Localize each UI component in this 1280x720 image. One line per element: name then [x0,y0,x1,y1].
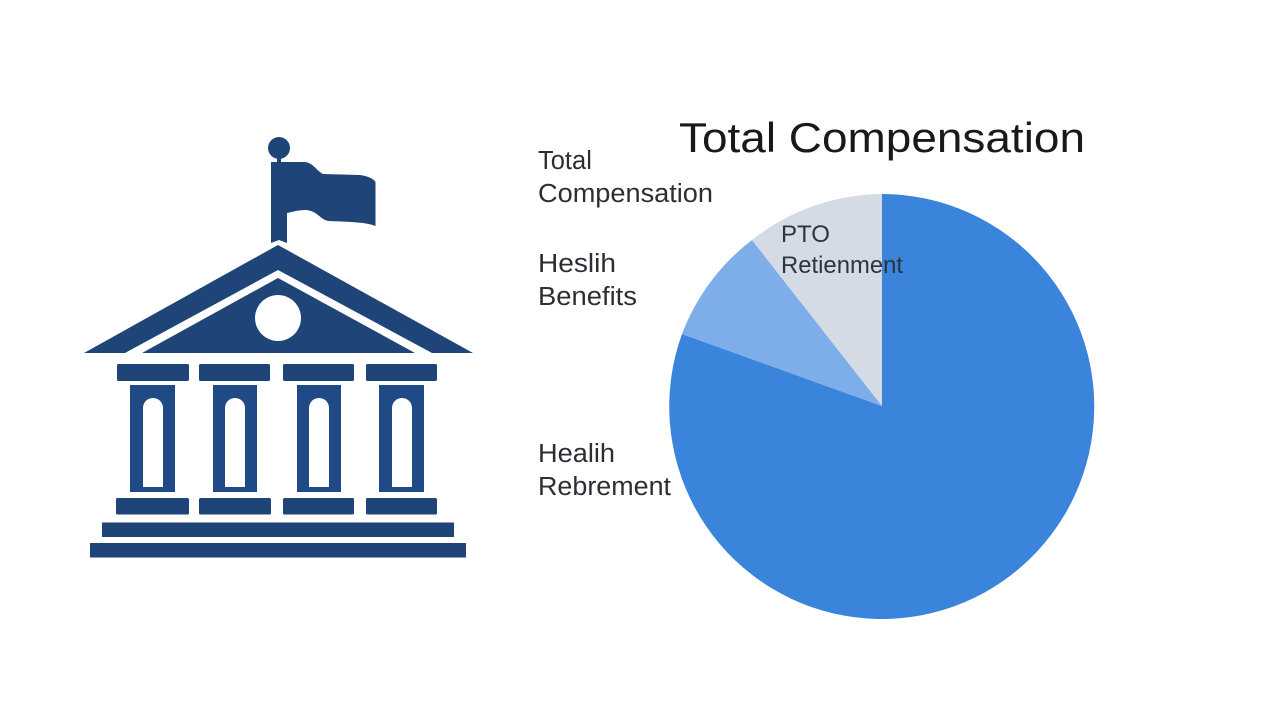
icon: column bases [116,498,437,514]
label: health retirement: Healih [538,440,615,468]
pie slice: grey [752,194,882,406]
pie slice: light blue [682,240,882,406]
icon: roof pediment [84,245,473,353]
icon: steps [90,522,466,558]
pie slice: largest blue [669,194,1094,619]
label: health benefits: Heslih [538,250,616,278]
label: total compensation: Total [538,147,592,175]
pie chart [669,194,1094,619]
label: pto retirement: PTO [781,221,830,248]
label: total compensation: Compensation [538,180,713,208]
icon: government building with flag [84,137,473,558]
icon: columns [130,385,424,492]
label: pto retirement: Retienment [781,252,903,279]
icon: flag [268,137,376,243]
label: health retirement: Rebrement [538,473,671,501]
icon: column capitals [117,364,437,381]
label: health benefits: Benefits [538,283,637,311]
title: Total Compensation [679,114,1085,161]
